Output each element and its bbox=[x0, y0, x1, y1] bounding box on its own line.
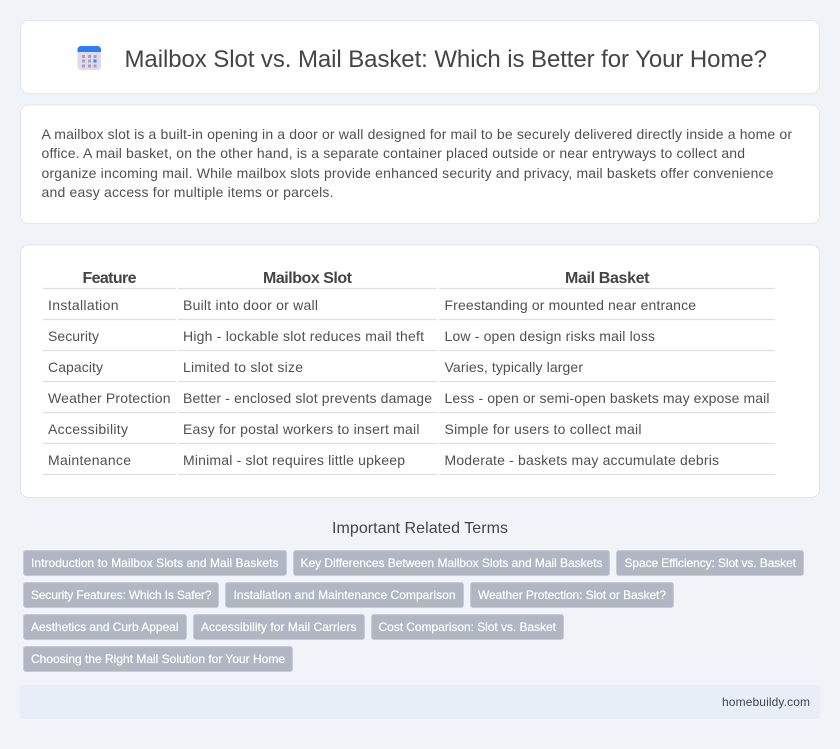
panel: comparison table bbox=[20, 245, 820, 498]
panel: introduction bbox=[20, 105, 820, 224]
tag: key differences bbox=[294, 550, 610, 576]
intro paragraph: office. A mail basket, on the other hand, is a separate container placed outside or near entryways to collect and bbox=[42, 145, 745, 161]
row: weather protection bbox=[48, 390, 770, 406]
row: maintenance bbox=[48, 452, 719, 468]
panel: title header bbox=[20, 20, 820, 94]
row: maintenance: Moderate - baskets may accumulate debris bbox=[444, 452, 719, 468]
row: weather protection: Less - open or semi-open baskets may expose mail bbox=[444, 390, 770, 406]
row: accessibility: Simple for users to collect mail bbox=[444, 421, 642, 437]
title: Mailbox Slot vs. Mail Basket: Which is Better for Your Home? bbox=[124, 46, 767, 73]
heading: important related terms: Important Related Terms bbox=[332, 520, 508, 537]
tag: space efficiency: Space Efficiency: Slot vs. Basket bbox=[624, 556, 797, 570]
tag: security features: Security Features: Which Is Safer? bbox=[31, 588, 212, 602]
tag: weather protection bbox=[470, 582, 674, 608]
tag: security features bbox=[24, 582, 218, 608]
row: accessibility: Easy for postal workers to insert mail bbox=[183, 421, 420, 437]
tag: cost comparison bbox=[372, 614, 564, 640]
table header row: Mail Basket bbox=[565, 270, 650, 287]
related terms tags bbox=[24, 550, 804, 672]
tag: weather protection: Weather Protection: Slot or Basket? bbox=[478, 588, 666, 602]
row: weather protection: Weather Protection bbox=[48, 390, 170, 406]
row: accessibility bbox=[48, 421, 642, 437]
tag: installation and maintenance: Installation and Maintenance Comparison bbox=[234, 588, 456, 602]
row: accessibility: Accessibility bbox=[48, 421, 128, 437]
row: security: Low - open design risks mail loss bbox=[444, 328, 655, 344]
row: security bbox=[48, 328, 655, 344]
tag: aesthetics bbox=[24, 614, 186, 640]
row: installation bbox=[48, 297, 696, 313]
tag: accessibility bbox=[194, 614, 364, 640]
tag: aesthetics: Aesthetics and Curb Appeal bbox=[31, 620, 178, 634]
tag: cost comparison: Cost Comparison: Slot vs. Basket bbox=[378, 620, 557, 634]
intro paragraph: organize incoming mail. While mailbox slots provide enhanced security and privacy, mail baskets offer convenience bbox=[42, 165, 774, 181]
table header row: Mailbox Slot bbox=[263, 270, 353, 287]
row: capacity: Limited to slot size bbox=[183, 359, 303, 375]
row: installation: Installation bbox=[48, 297, 118, 313]
row: maintenance: Minimal - slot requires little upkeep bbox=[183, 452, 405, 468]
tag: key differences: Key Differences Between Mailbox Slots and Mail Baskets bbox=[300, 556, 602, 570]
tag: choosing the right solution: Choosing the Right Mail Solution for Your Home bbox=[31, 652, 285, 666]
row: maintenance: Maintenance bbox=[48, 452, 131, 468]
row: installation: Built into door or wall bbox=[183, 297, 318, 313]
tag: installation and maintenance bbox=[226, 582, 464, 608]
row: capacity bbox=[48, 359, 583, 375]
row: installation: Freestanding or mounted near entrance bbox=[444, 297, 696, 313]
tag: accessibility: Accessibility for Mail Carriers bbox=[201, 620, 356, 634]
row: weather protection: Better - enclosed slot prevents damage bbox=[183, 390, 432, 406]
intro paragraph bbox=[42, 126, 792, 200]
tag: space efficiency bbox=[616, 550, 804, 576]
footer bbox=[20, 685, 820, 719]
tag: choosing the right solution bbox=[24, 646, 292, 672]
table header row: Feature bbox=[82, 270, 137, 287]
footer brand: homebuildy.com bbox=[722, 695, 810, 709]
icon: calendar bbox=[78, 46, 101, 70]
row: capacity: Varies, typically larger bbox=[444, 359, 583, 375]
tag: introduction: Introduction to Mailbox Slots and Mail Baskets bbox=[31, 556, 278, 570]
intro paragraph: and easy access for multiple items or parcels. bbox=[42, 184, 334, 200]
table header row bbox=[82, 270, 650, 287]
row: security: High - lockable slot reduces mail theft bbox=[183, 328, 424, 344]
row: capacity: Capacity bbox=[48, 359, 103, 375]
intro paragraph: A mailbox slot is a built-in opening in a door or wall designed for mail to be securely delivered directly inside a home or bbox=[42, 126, 792, 142]
row: security: Security bbox=[48, 328, 99, 344]
tag: introduction bbox=[24, 550, 286, 576]
